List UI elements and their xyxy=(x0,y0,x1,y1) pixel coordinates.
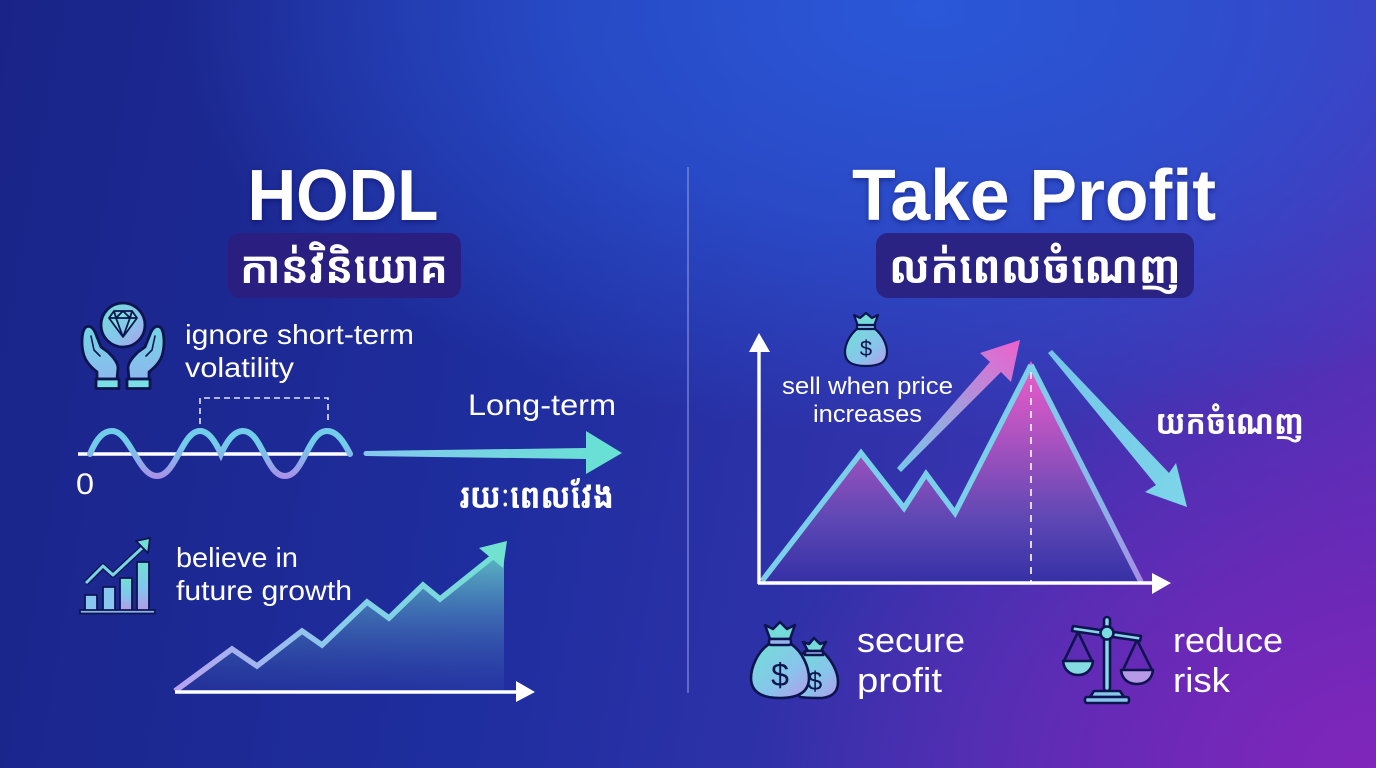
text: ignore short-term volatility xyxy=(185,319,414,383)
text: sell when price increases: sell when price xyxy=(782,373,953,400)
text: reduce risk: risk xyxy=(1173,662,1231,700)
text: sell when price increases: increases xyxy=(813,401,922,428)
heading: HODL: HODL xyxy=(248,156,438,236)
label: Long-term: Long-term xyxy=(468,389,616,422)
heading: Take Profit: Take Profit xyxy=(852,156,1216,236)
text: sell when price increases xyxy=(782,373,953,428)
text: secure profit: secure xyxy=(857,622,965,660)
panel: Take Profit xyxy=(749,156,1304,703)
Khmer subtitle: HODL: កាន់វិនិយោគ xyxy=(240,236,448,297)
text: ignore short-term volatility: ignore short-term xyxy=(185,319,414,350)
Khmer label: long-term: រយៈពេលវែង xyxy=(459,472,614,519)
icon: growth bars xyxy=(80,538,155,614)
Khmer label: take profit: យកចំណេញ xyxy=(1156,398,1304,444)
arrow: price rising xyxy=(897,340,1020,472)
icon: money bags: $ xyxy=(808,666,823,696)
text: reduce risk: reduce xyxy=(1173,622,1283,660)
text: reduce risk xyxy=(1173,622,1283,700)
text: secure profit: profit xyxy=(857,662,943,700)
icon: money bags xyxy=(751,622,838,698)
icon: balance scale xyxy=(1063,617,1153,703)
volatility wave chart xyxy=(76,398,352,501)
growth chart xyxy=(175,541,535,702)
divider xyxy=(687,167,689,693)
arrow: long-term xyxy=(364,431,622,474)
text: believe in future growth: believe in xyxy=(176,542,298,573)
icon: money bag xyxy=(845,313,887,366)
icon: hands holding diamond xyxy=(82,303,164,388)
arrow: price falling xyxy=(1048,350,1187,507)
Khmer subtitle: Take Profit: លក់ពេលចំណេញ xyxy=(889,236,1181,297)
price chart xyxy=(749,333,1171,594)
icon: money bag: $ xyxy=(860,336,872,361)
text: secure profit xyxy=(857,622,965,700)
panel: HODL xyxy=(76,156,622,702)
icon: money bags: $ xyxy=(771,657,789,693)
text: ignore short-term volatility: volatility xyxy=(185,352,294,383)
volatility wave chart: 0 xyxy=(76,468,94,501)
text: believe in future growth xyxy=(176,542,352,606)
text: believe in future growth: future growth xyxy=(176,575,352,606)
